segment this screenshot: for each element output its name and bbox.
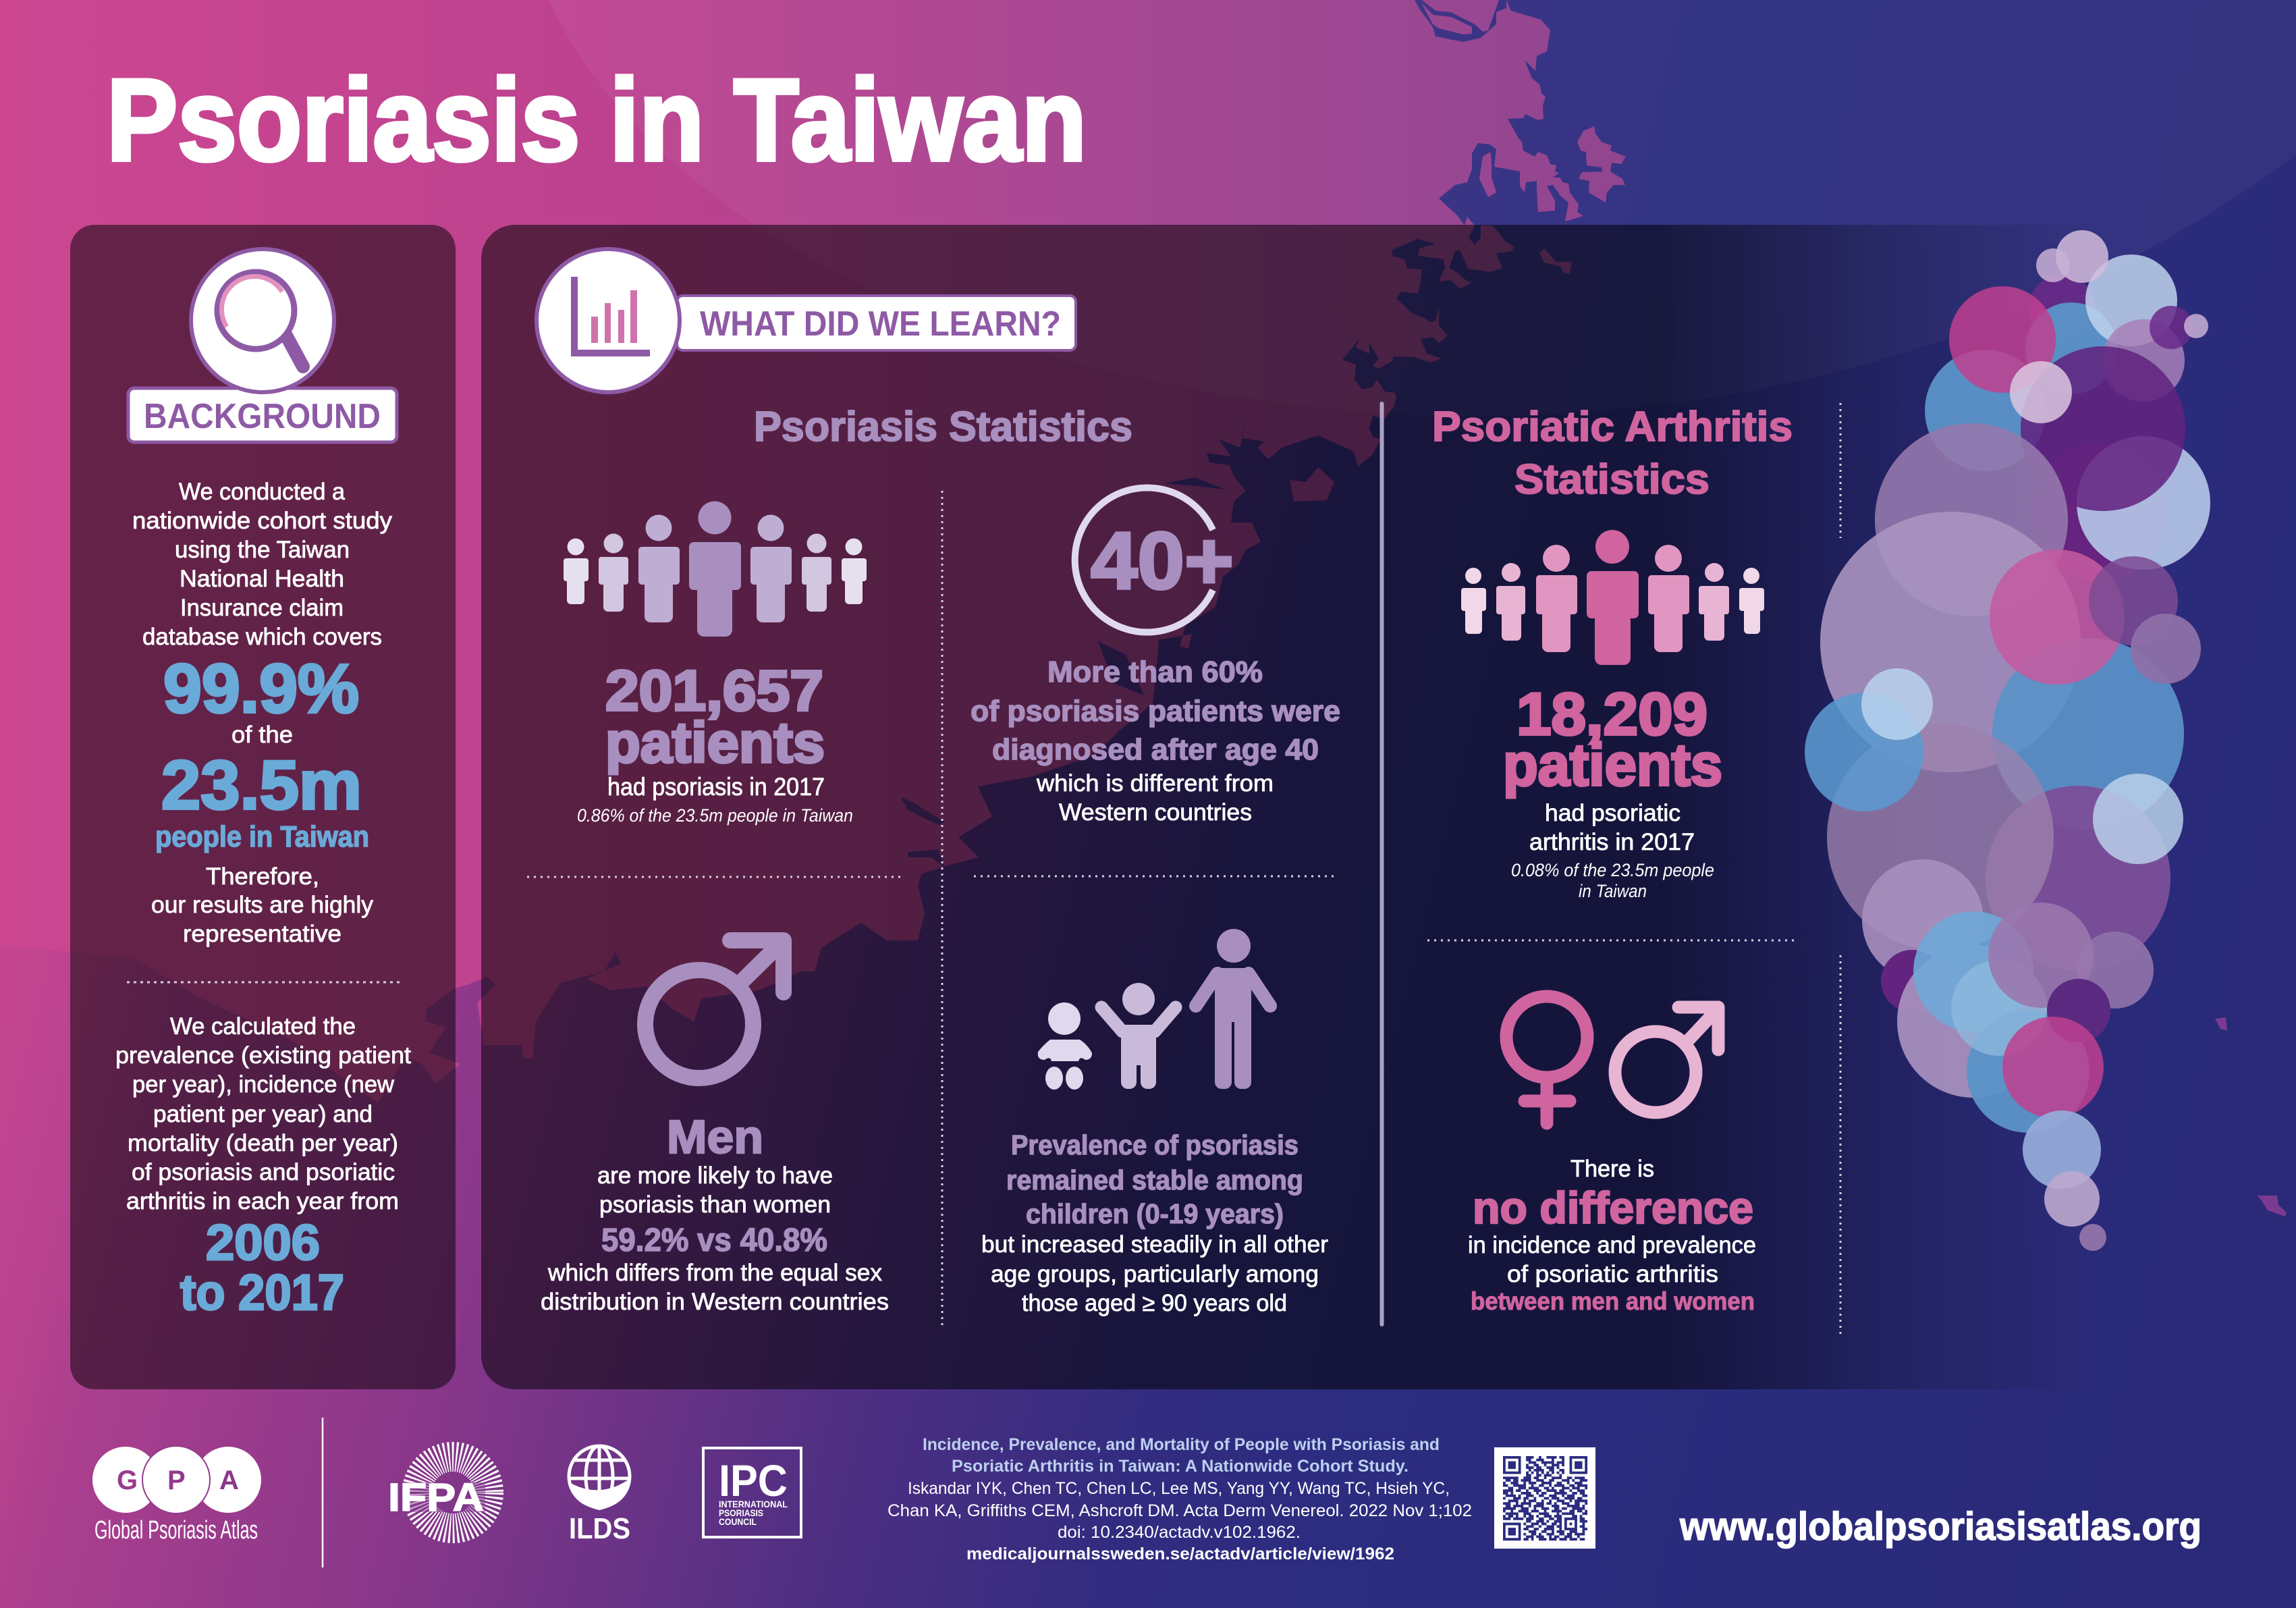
text block: cohort study description: National Health [180, 566, 344, 592]
text block: men: psoriasis than women [599, 1191, 831, 1218]
distant small islands [2215, 1017, 2287, 1216]
text block: no difference: There is [1570, 1156, 1654, 1182]
citation: doi: 10.2340/actadv.v102.1962. [1058, 1523, 1301, 1542]
text block: prevalence calculation: per year), incidence (new [132, 1071, 395, 1098]
text block: representative: Therefore, [206, 863, 319, 890]
text block: cohort study description: database which covers [142, 624, 382, 650]
text block: prevalence among age groups [981, 1129, 1328, 1316]
stat: 18,209 patients [1503, 680, 1722, 798]
text block: diagnosed after age 40: More than 60% [1047, 655, 1263, 689]
citation [887, 1435, 1472, 1563]
footer logo: ILDS [568, 1446, 630, 1545]
text block: no difference: of psoriatic arthritis [1507, 1261, 1718, 1287]
footer logo: IPC: IPC [719, 1455, 788, 1505]
heading: psoriatic arthritis statistics [1432, 404, 1793, 503]
text block: men: Men [667, 1110, 763, 1163]
icon: pink group of people [1461, 530, 1764, 665]
map of the mainland coast [0, 0, 1626, 1103]
text block: prevalence among age groups: those aged ≥ 90 years old [1022, 1290, 1287, 1316]
text block: prevalence calculation: patient per year) and [153, 1101, 373, 1127]
text block: representative: representative [183, 921, 341, 947]
text: had psoriasis in 2017 [577, 773, 853, 826]
stat: 201,657 patients: 201,657 [605, 659, 823, 722]
text block: representative [151, 863, 373, 947]
text block: prevalence among age groups: age groups, particularly among [991, 1261, 1319, 1287]
text block: prevalence calculation: We calculated the [170, 1013, 356, 1040]
icon: magnifying glass [128, 249, 397, 442]
website URL: www.globalpsoriasisatlas.org [1679, 1505, 2202, 1549]
footer logo: IPC [703, 1448, 801, 1537]
text block: diagnosed after age 40 [971, 655, 1340, 826]
stat: 18,209 patients: 18,209 [1516, 680, 1707, 747]
heading: psoriatic arthritis statistics: Statistics [1514, 456, 1710, 503]
stat: 99.9%: 99.9% [163, 650, 359, 727]
citation: Incidence, Prevalence, and Mortality of People with Psoriasis and [923, 1435, 1440, 1454]
text block: prevalence calculation: mortality (death per year) [128, 1130, 398, 1156]
footer logo: IPC: INTERNATIONAL [719, 1499, 788, 1509]
text block: prevalence among age groups: children (0-19 years) [1026, 1198, 1284, 1229]
footer logo: Global Psoriasis Atlas: Global Psoriasis Atlas [94, 1516, 258, 1545]
stat: 23.5m: 23.5m [161, 747, 362, 824]
text block: prevalence among age groups: remained stable among [1006, 1164, 1303, 1196]
footer logo: Global Psoriasis Atlas: P [167, 1466, 186, 1495]
icon: female and male symbols [1506, 996, 1718, 1123]
text block: men: which differs from the equal sex [547, 1260, 882, 1286]
text block: men: distribution in Western countries [541, 1289, 889, 1315]
text block: diagnosed after age 40: of psoriasis patients were [971, 695, 1340, 728]
icon: group of people [564, 501, 867, 637]
text block: cohort study description: using the Taiwan [175, 537, 350, 563]
footer logo: IPC: COUNCIL [719, 1516, 757, 1527]
footer logo: ILDS: ILDS [569, 1512, 630, 1545]
text block: cohort study description: Insurance claim [180, 595, 344, 621]
text: had psoriasis in 2017: 0.86% of the 23.5m people in Taiwan [577, 805, 853, 826]
text: had psoriatic arthritis: in Taiwan [1579, 881, 1647, 901]
QR code [1494, 1447, 1595, 1549]
footer logo: IFPA [388, 1457, 489, 1528]
citation: Chan KA, Griffiths CEM, Ashcroft DM. Acta Derm Venereol. 2022 Nov 1;102 [887, 1501, 1472, 1520]
heading: background: BACKGROUND [144, 397, 381, 436]
citation: Psoriatic Arthritis in Taiwan: A Nationwide Cohort Study. [952, 1457, 1409, 1476]
label: what did we learn: WHAT DID WE LEARN? [700, 304, 1061, 344]
footer logo: Global Psoriasis Atlas: G [117, 1466, 138, 1495]
icon: bar chart [537, 249, 680, 392]
text block: representative: our results are highly [151, 892, 373, 918]
text block: cohort study description: nationwide cohort study [132, 508, 393, 534]
icon: forty plus [1075, 487, 1234, 632]
text block: prevalence among age groups: Prevalence of psoriasis [1011, 1129, 1299, 1160]
stat: 2006 to 2017 [180, 1214, 344, 1320]
text: had psoriatic arthritis: arthritis in 2017 [1529, 829, 1695, 855]
title: Psoriasis in Taiwan [107, 55, 1087, 185]
stat: 2006 to 2017: 2006 [206, 1214, 320, 1270]
text: had psoriasis in 2017: had psoriasis in 2017 [607, 773, 825, 801]
map of Taiwan made of bubbles [1805, 230, 2210, 1251]
text: of the: of the [231, 722, 293, 748]
text block: diagnosed after age 40: which is different from [1036, 770, 1274, 797]
citation: medicaljournalssweden.se/actadv/article/view/1962 [966, 1545, 1394, 1563]
icon: baby, child and adult [1038, 929, 1270, 1090]
label: what did we learn [677, 296, 1076, 350]
text block: men [541, 1110, 889, 1315]
large pale arc in the background [549, 0, 2296, 417]
stat: 201,657 patients [605, 659, 825, 774]
icon: male symbol [645, 940, 784, 1078]
text block: diagnosed after age 40: Western countries [1059, 799, 1252, 826]
citation: Iskandar IYK, Chen TC, Chen LC, Lee MS, Yang YY, Wang TC, Hsieh YC, [908, 1479, 1450, 1498]
text block: no difference: in incidence and prevalence [1468, 1232, 1756, 1258]
text block: prevalence calculation: arthritis in each year from [126, 1188, 399, 1214]
footer logo: IFPA: IFPA [388, 1476, 484, 1520]
text block: prevalence calculation: of psoriasis and psoriatic [132, 1159, 395, 1185]
text block: men: are more likely to have [597, 1162, 833, 1189]
text block: prevalence among age groups: but increased steadily in all other [981, 1231, 1328, 1258]
footer logo: IPC: PSORIASIS [719, 1507, 763, 1518]
text block: no difference: no difference [1473, 1183, 1753, 1233]
panel: what did we learn [481, 225, 2296, 1389]
text block: men: 59.2% vs 40.8% [601, 1223, 827, 1258]
text block: cohort study description: We conducted a [179, 479, 346, 505]
stat: 2006 to 2017: to 2017 [180, 1264, 344, 1320]
text: had psoriatic arthritis: 0.08% of the 23.5m people [1511, 860, 1714, 880]
text block: prevalence calculation [115, 1013, 411, 1214]
footer logo: Global Psoriasis Atlas [92, 1446, 261, 1545]
text: had psoriatic arthritis [1511, 800, 1714, 901]
footer logo: Global Psoriasis Atlas: A [219, 1466, 239, 1495]
text block: no difference [1468, 1156, 1756, 1315]
text block: no difference: between men and women [1471, 1287, 1755, 1315]
icon: forty plus: 40+ [1091, 516, 1234, 606]
stat: 201,657 patients: patients [605, 711, 825, 774]
heading: psoriasis statistics: Psoriasis Statistics [754, 404, 1132, 450]
heading: psoriatic arthritis statistics: Psoriatic Arthritis [1432, 404, 1793, 450]
stat: 18,209 patients: patients [1503, 731, 1722, 798]
panel: background [70, 225, 456, 1389]
text: had psoriatic arthritis: had psoriatic [1545, 800, 1680, 826]
text block: diagnosed after age 40: diagnosed after age 40 [992, 733, 1319, 766]
text: people in Taiwan: people in Taiwan [155, 820, 369, 853]
text block: cohort study description [132, 479, 393, 650]
text block: prevalence calculation: prevalence (existing patient [115, 1042, 411, 1069]
